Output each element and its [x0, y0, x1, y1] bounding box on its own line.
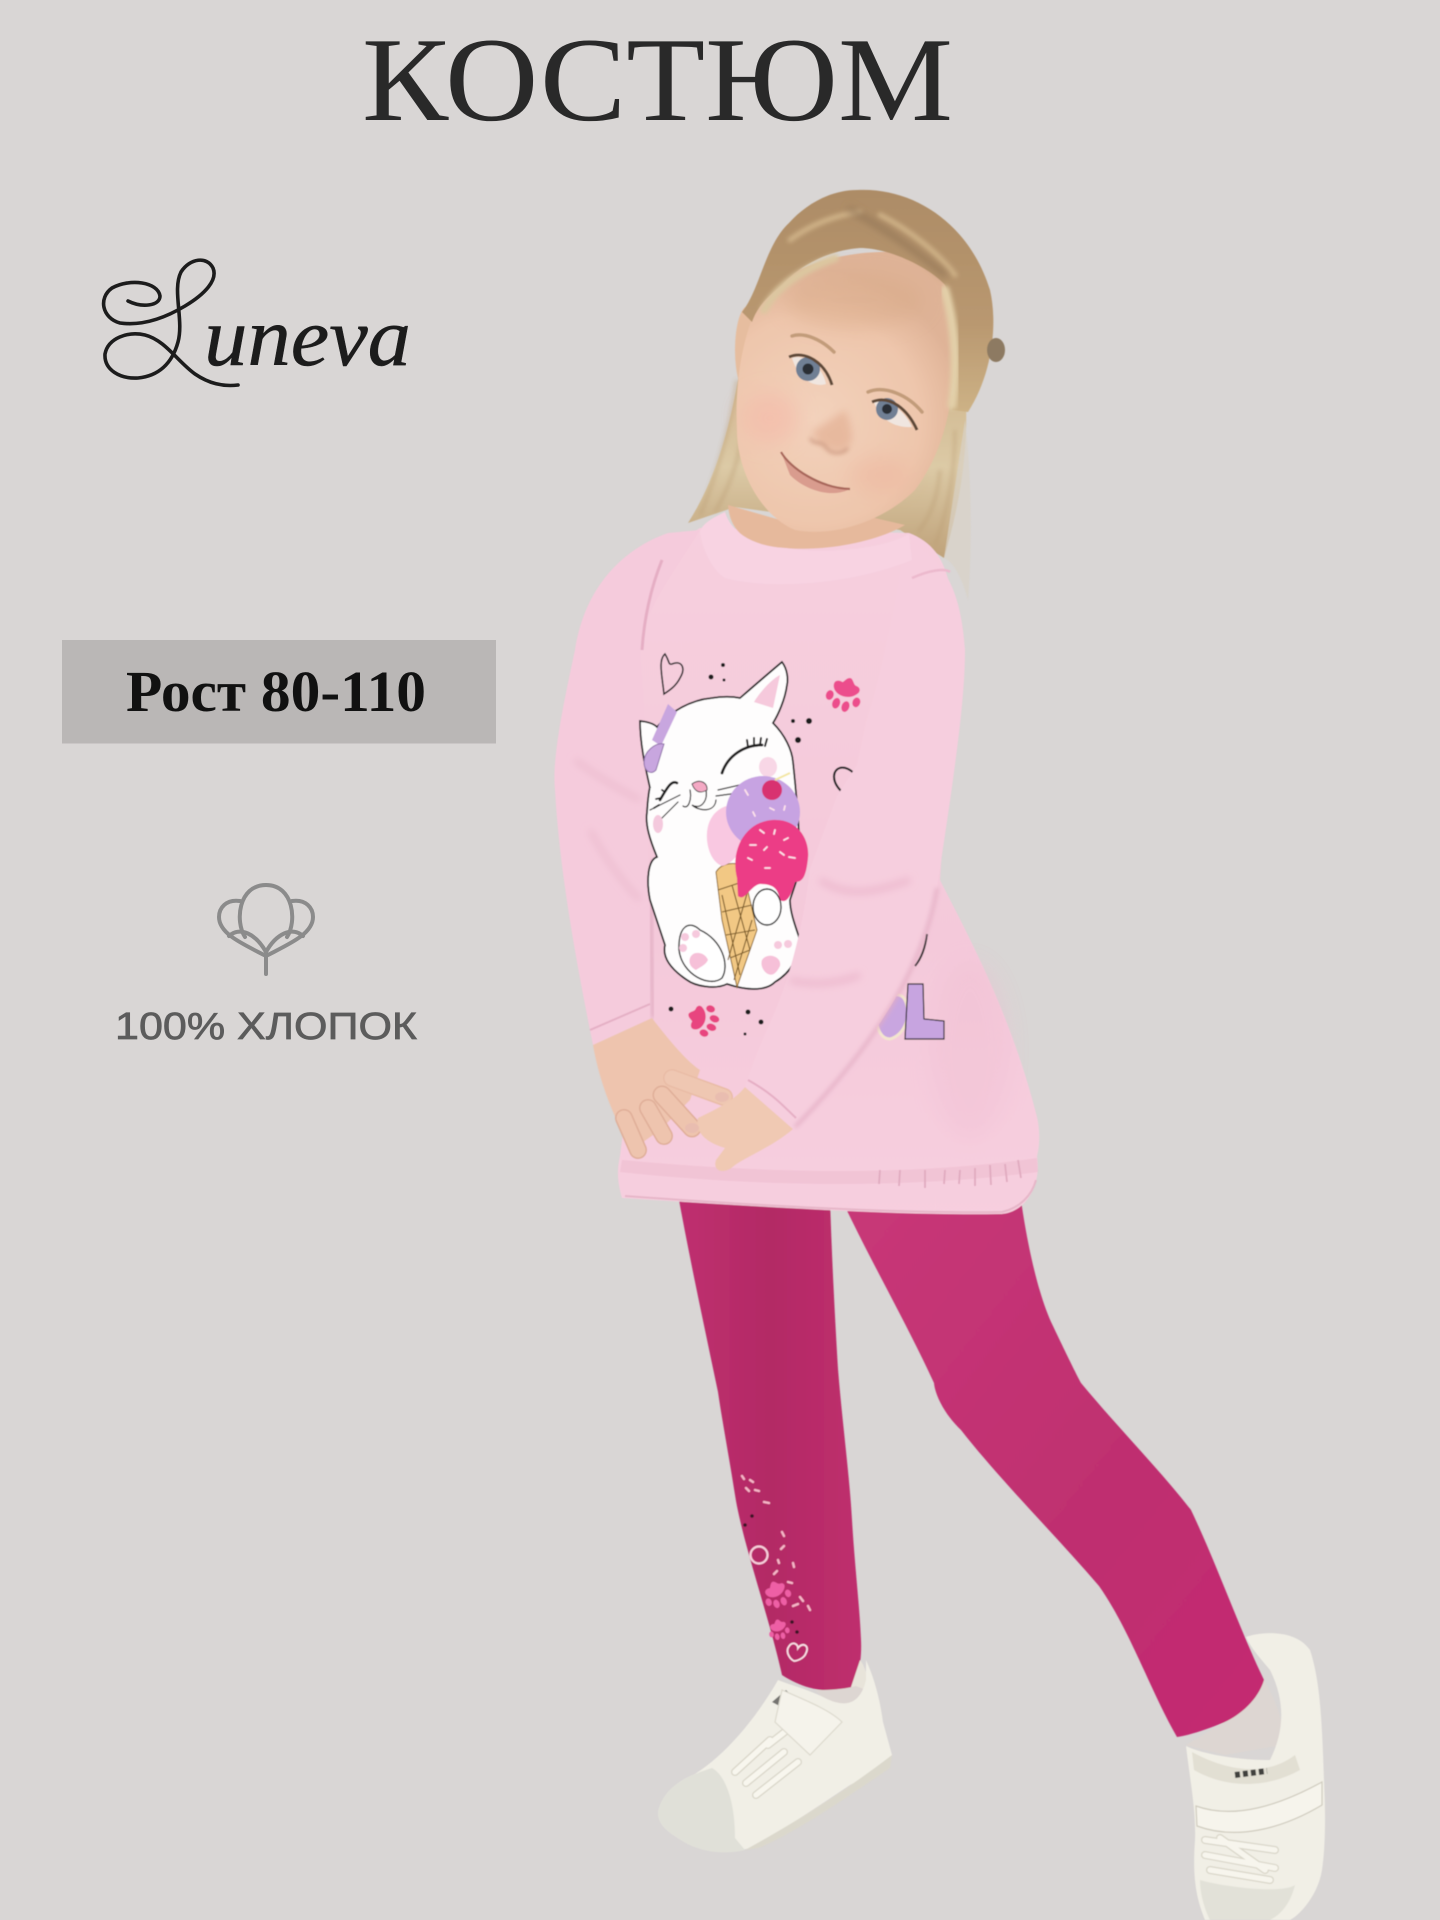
ice cream cone — [716, 864, 757, 987]
back hair — [688, 330, 971, 600]
height badge: Рост 80-110 — [126, 659, 426, 724]
heart outline — [661, 654, 683, 694]
cat hand and paws — [679, 889, 792, 981]
hair clip — [987, 338, 1005, 362]
nose — [810, 410, 852, 453]
shoe: right — [1186, 1633, 1325, 1920]
neck and collar — [700, 505, 912, 584]
cheek blush — [742, 392, 798, 444]
shirt body — [618, 528, 1039, 1214]
hidden print outline — [915, 934, 927, 966]
hands — [593, 1018, 793, 1171]
mouth — [781, 452, 850, 493]
leg: right — [842, 1200, 1264, 1737]
logo: Luneva: Luneva — [202, 291, 411, 384]
fingers — [624, 1078, 724, 1150]
right hand — [697, 1087, 793, 1171]
pink paws — [822, 672, 867, 716]
cat body — [640, 662, 800, 989]
heart near sleeve — [834, 768, 858, 799]
child figure — [554, 190, 1325, 1920]
cat print — [640, 654, 944, 1040]
leg: left — [679, 1200, 861, 1690]
eyes — [789, 335, 922, 430]
height badge — [62, 640, 496, 744]
letters OL — [877, 984, 944, 1039]
cat ear inner — [754, 675, 780, 708]
sleeve: left — [554, 530, 700, 1045]
material label: 100% ХЛОПОК — [115, 1006, 417, 1048]
hair highlights — [764, 210, 955, 405]
cat face — [650, 738, 770, 825]
face — [737, 252, 955, 532]
hair cap — [742, 190, 993, 412]
sleeve: right — [745, 540, 965, 1129]
icon: cotton — [219, 885, 313, 974]
ear — [735, 306, 761, 394]
scoops — [707, 773, 808, 901]
logo: Luneva — [104, 260, 411, 386]
title: КОСТЮМ — [362, 13, 953, 146]
black dots — [668, 663, 812, 1036]
left hand palm — [593, 1018, 700, 1150]
legging print — [742, 1476, 810, 1661]
shoe: left — [658, 1660, 892, 1852]
head — [735, 190, 1005, 532]
bow — [644, 704, 677, 772]
forehead tone — [785, 272, 925, 328]
